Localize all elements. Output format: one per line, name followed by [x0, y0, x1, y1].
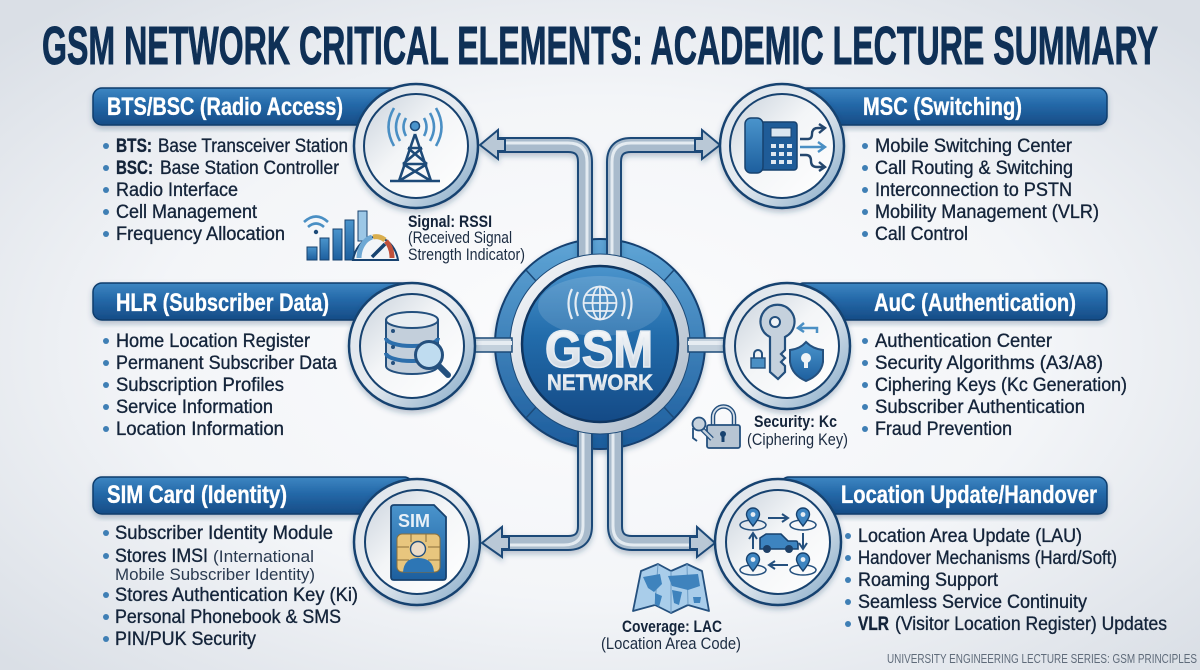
icon: radio tower	[354, 84, 478, 208]
icon: telephone with routing arrows	[720, 84, 844, 208]
bullet list: Location Update/Handover: (Visitor Location Register) Updates	[895, 614, 1167, 635]
bullet list: AuC: Subscriber Authentication	[875, 397, 1085, 418]
panel: SIM Card	[93, 477, 480, 650]
bullet list: Location Update/Handover	[845, 526, 1167, 635]
arrow: GSM to SIM Card	[482, 430, 585, 557]
bullet list: HLR	[103, 331, 337, 440]
central hub: GSM Network	[510, 254, 690, 434]
bullet list: MSC: Mobile Switching Center	[875, 136, 1073, 157]
heading: AuC: AuC (Authentication)	[874, 289, 1076, 317]
icon: key, shield and lock	[724, 283, 850, 409]
icon: world map	[633, 564, 709, 613]
bullet list: SIM Card: Subscriber Identity Module	[115, 523, 333, 544]
callout: Signal RSSI: (Received Signal	[408, 229, 512, 247]
connector: HLR to hub	[470, 338, 512, 352]
heading: HLR: HLR (Subscriber Data)	[116, 289, 329, 317]
arrow: GSM to Location Update	[613, 430, 715, 557]
callout: Signal RSSI: Signal: RSSI	[408, 212, 492, 231]
bullet list: HLR: Subscription Profiles	[116, 375, 284, 396]
bullet list: BTS/BSC: Base Transceiver Station	[158, 136, 348, 157]
bullet list: SIM Card: Mobile Subscriber Identity)	[115, 566, 315, 584]
callout: Security Kc: (Ciphering Key)	[747, 431, 848, 449]
panel: HLR	[93, 283, 475, 440]
icon: SIM card	[354, 479, 480, 605]
callout: Security Kc	[747, 412, 848, 449]
bullet list: MSC: Call Control	[875, 224, 968, 245]
bullet list: MSC	[862, 136, 1099, 245]
callout: Signal RSSI: Strength Indicator)	[408, 246, 525, 264]
bullet list: AuC: Authentication Center	[875, 331, 1053, 352]
callout: Coverage LAC	[601, 617, 741, 653]
bullet list: Location Update/Handover: Location Area Update (LAU)	[858, 526, 1082, 547]
icon: car with location pins	[715, 479, 841, 605]
bullet list: MSC: Call Routing & Switching	[875, 158, 1073, 179]
bullet list: BTS/BSC: Base Station Controller	[160, 158, 340, 179]
bullet list: Location Update/Handover: VLR	[858, 614, 889, 635]
bullet list: HLR: Service Information	[116, 397, 273, 418]
bullet list: Location Update/Handover: Roaming Support	[858, 570, 999, 591]
bullet list: SIM Card	[103, 523, 358, 650]
panel: BTS/BSC	[93, 84, 478, 245]
bullet list: SIM Card: Stores Authentication Key (Ki)	[115, 585, 358, 606]
icon: padlock and key	[692, 406, 740, 448]
bullet list: AuC	[862, 331, 1127, 440]
bullet list: BTS/BSC: BTS:	[116, 136, 152, 157]
bullet list: MSC: Interconnection to PSTN	[875, 180, 1072, 201]
panel: Location Update/Handover	[715, 477, 1167, 635]
bullet list: BTS/BSC: Cell Management	[116, 202, 258, 223]
callout: Coverage LAC: Coverage: LAC	[622, 617, 722, 636]
bullet list: MSC: Mobility Management (VLR)	[875, 202, 1099, 223]
icon: signal bars and gauge	[304, 211, 398, 260]
heading: Location Update/Handover: Location Update/Handover	[841, 481, 1097, 509]
bullet list: HLR: Location Information	[116, 419, 284, 440]
heading: BTS/BSC: BTS/BSC (Radio Access)	[107, 93, 343, 121]
bullet list: SIM Card: (International	[213, 548, 314, 566]
NETWORK wordmark: NETWORK	[547, 370, 653, 395]
bullet list: Location Update/Handover: Handover Mechanisms (Hard/Soft)	[858, 548, 1117, 569]
bullet list: BTS/BSC: Radio Interface	[116, 180, 238, 201]
bullet list: BTS/BSC: BSC:	[116, 158, 153, 179]
callout: Security Kc: Security: Kc	[754, 412, 837, 431]
connector: hub to AuC	[688, 338, 730, 352]
bullet list: AuC: Security Algorithms (A3/A8)	[875, 353, 1103, 374]
bullet list: AuC: Fraud Prevention	[875, 419, 1012, 440]
bullet list: HLR: Permanent Subscriber Data	[116, 353, 337, 374]
bullet list: SIM Card: Personal Phonebook & SMS	[115, 607, 341, 628]
header bar: SIM Card	[93, 477, 413, 514]
header bar: Location Update/Handover	[780, 477, 1107, 514]
icon: globe with signal waves	[568, 286, 632, 320]
GSM wordmark: GSM	[545, 321, 653, 379]
heading: MSC: MSC (Switching)	[863, 93, 1022, 121]
callout: Coverage LAC: (Location Area Code)	[601, 635, 741, 653]
hub outer ring	[495, 239, 705, 449]
heading: SIM Card: SIM Card (Identity)	[107, 481, 287, 509]
bullet list: SIM Card: PIN/PUK Security	[115, 629, 256, 650]
arrow: GSM to BTS/BSC	[480, 130, 587, 258]
panel: MSC	[720, 84, 1107, 245]
bullet list: Location Update/Handover: Seamless Service Continuity	[858, 592, 1087, 613]
header bar: AuC	[795, 283, 1107, 320]
header bar: HLR	[93, 283, 413, 320]
icon: database with magnifier	[349, 283, 475, 409]
bullet list: AuC: Ciphering Keys (Kc Generation)	[875, 375, 1127, 396]
icon: SIM card: SIM	[398, 511, 430, 531]
bullet list: BTS/BSC: Frequency Allocation	[116, 224, 285, 245]
bullet list: HLR: Home Location Register	[116, 331, 311, 352]
header bar: BTS/BSC	[93, 88, 413, 125]
bullet list: SIM Card: Stores IMSI	[115, 546, 208, 567]
arrow: GSM to MSC	[612, 130, 720, 258]
header bar: MSC	[790, 88, 1107, 125]
panel: AuC	[724, 283, 1127, 440]
bullet list: BTS/BSC	[103, 136, 348, 245]
callout: Signal RSSI	[408, 212, 525, 264]
